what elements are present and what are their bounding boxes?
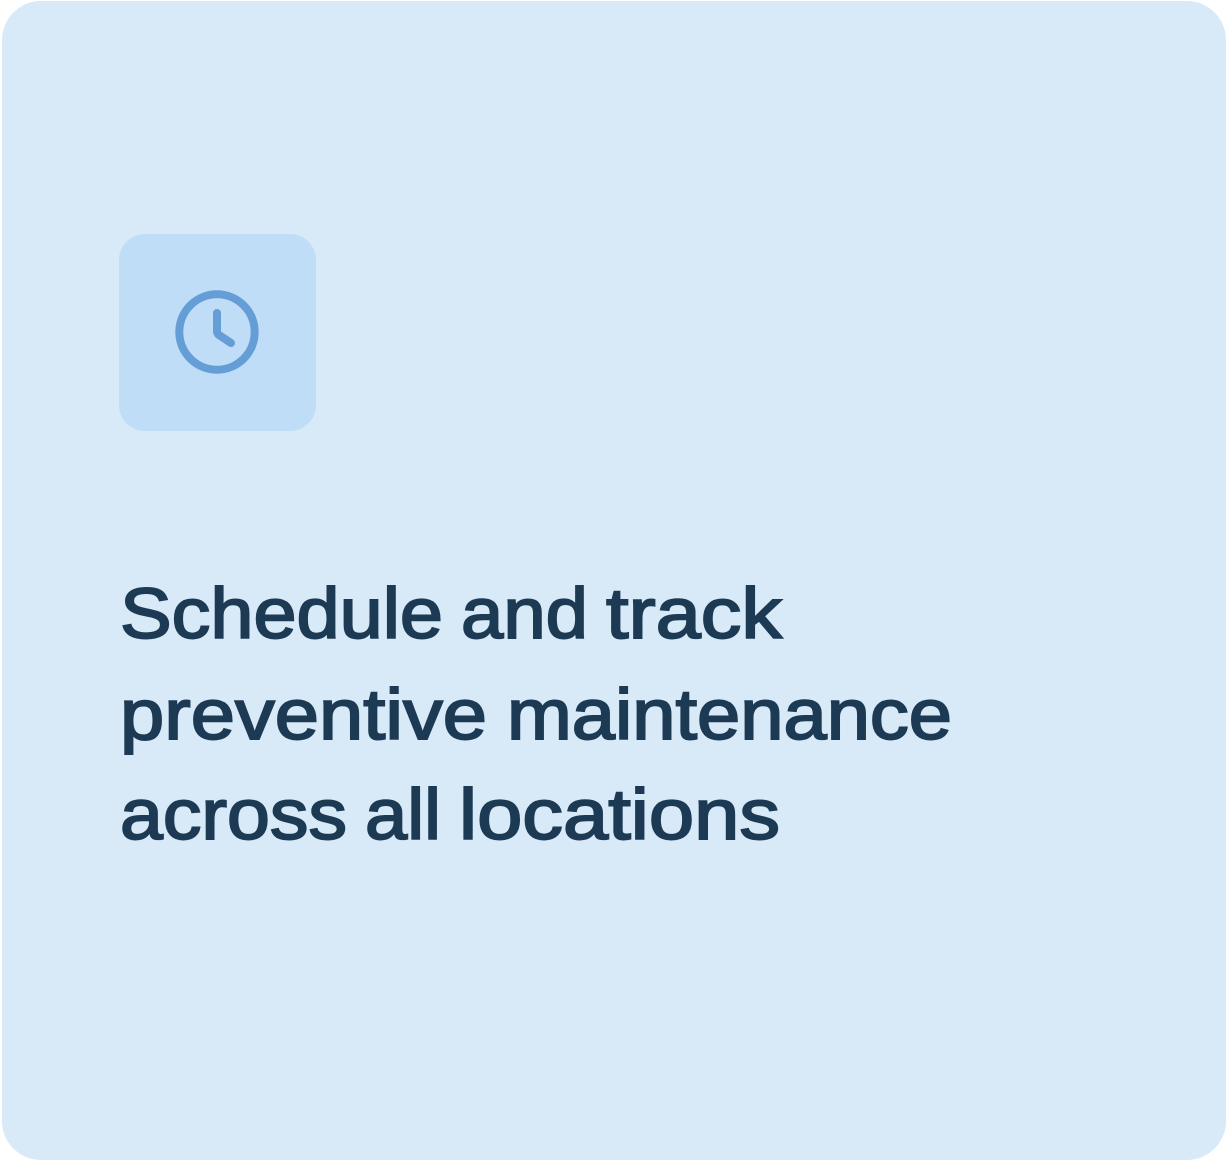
text block: main message: track (606, 575, 783, 654)
icon: clock in rounded tile (119, 234, 316, 431)
text block: main message: preventive (120, 676, 487, 755)
text block: main message: Schedule (120, 575, 443, 654)
text block: main message (120, 575, 952, 855)
text block: main message: all (365, 776, 441, 855)
text block: main message: maintenance (507, 676, 952, 755)
text block: main message: across (120, 776, 347, 855)
text block: main message: and (461, 575, 588, 654)
text block: main message: locations (459, 776, 780, 855)
